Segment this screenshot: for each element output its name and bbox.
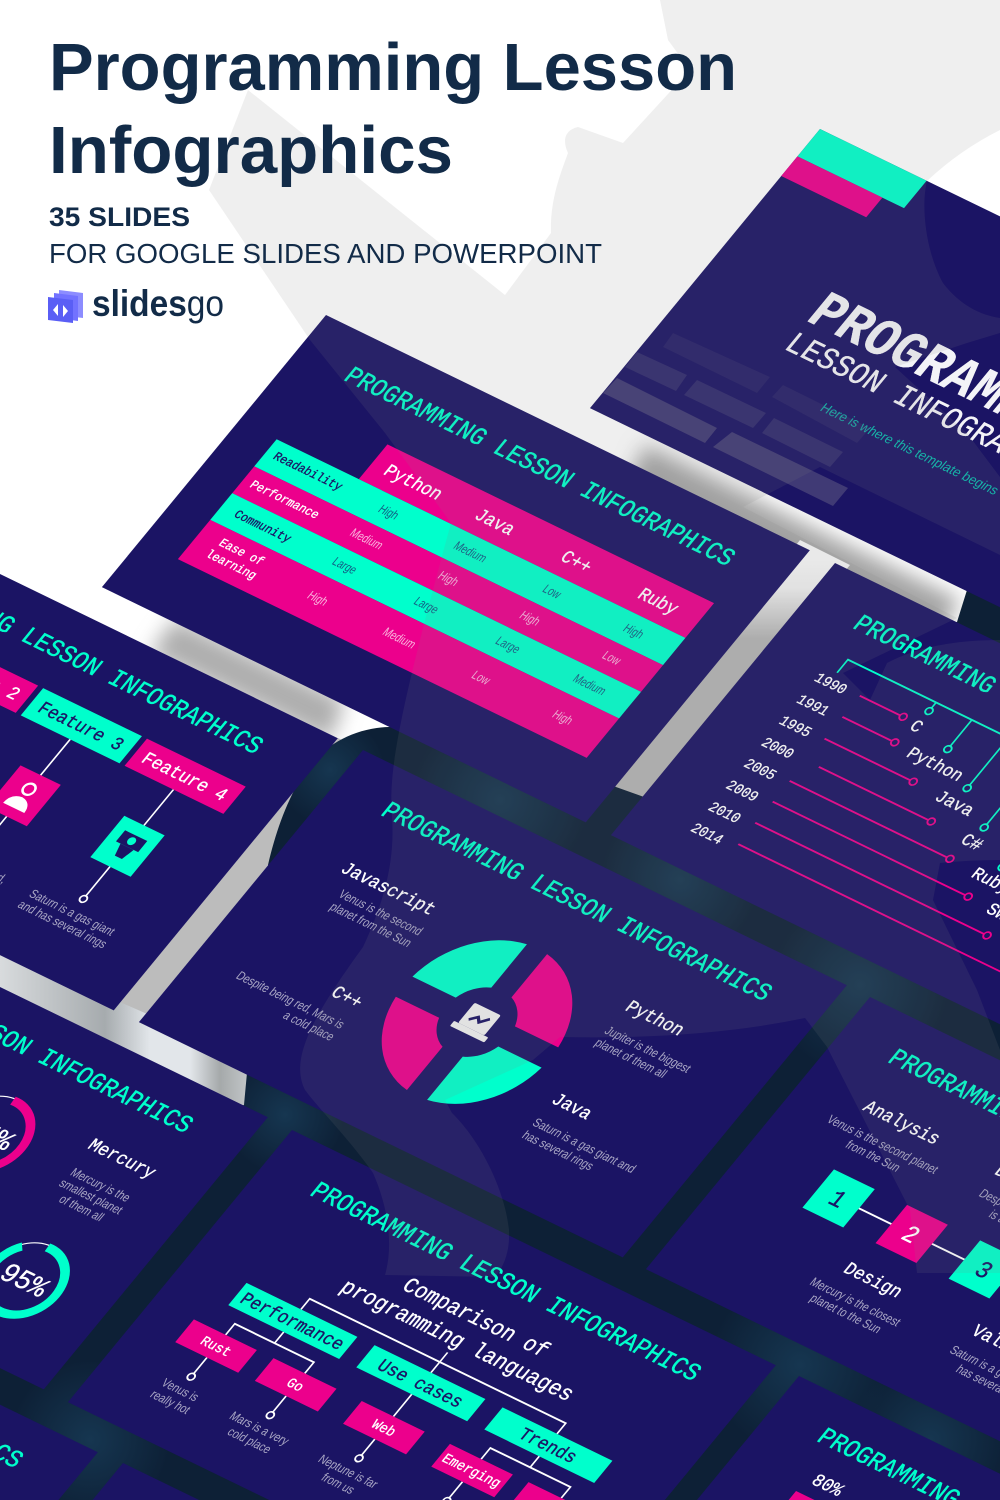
- dark backdrop behind lower slides: [0, 560, 1000, 1500]
- year labels: 2010: [704, 800, 744, 827]
- row: performance: Performance: [246, 478, 322, 522]
- connector lines: [0, 689, 173, 896]
- emerging node: Emerging: [437, 1452, 504, 1492]
- heading: PROGRAMMING LESSON INFOGRAPHICS: [337, 363, 741, 573]
- step 2: [876, 1205, 948, 1263]
- pink year lines: [738, 693, 1000, 984]
- bar: [775, 1491, 927, 1500]
- title: Infographics: [49, 113, 453, 188]
- mercury label: of them all: [56, 1192, 107, 1224]
- year labels: 1995: [775, 714, 815, 741]
- javascript label: Javascript: [335, 860, 440, 920]
- web node: Web: [367, 1417, 399, 1441]
- row: ease of learning: Ease of: [215, 536, 267, 569]
- row: community: [210, 493, 641, 719]
- icon: laptop: [450, 1001, 505, 1043]
- row: performance: Low: [599, 650, 624, 668]
- tree title: Comparison of: [396, 1274, 555, 1363]
- design label: Mercury is the closest: [807, 1275, 905, 1330]
- step 1: [802, 1169, 875, 1227]
- feature 4 tag: Feature 4: [136, 750, 231, 806]
- row: ease of learning: Low: [468, 669, 493, 688]
- python label: [592, 998, 716, 1088]
- title: Programming Lesson: [49, 30, 737, 105]
- rust node: [175, 1319, 257, 1373]
- java label: has several rings: [519, 1128, 597, 1173]
- row: ease of learning: Medium: [379, 626, 418, 651]
- teal language branches: [750, 660, 1000, 982]
- icon: slidesgo logo: [48, 290, 83, 323]
- design label: planet to the Sun: [807, 1291, 885, 1336]
- node descriptions: Venus is: [158, 1375, 203, 1404]
- analysis label: from the Sun: [842, 1137, 904, 1175]
- feature 4 tag: [125, 739, 246, 814]
- table header: Python: [378, 462, 446, 505]
- development label: [964, 1162, 1000, 1257]
- javascript label: [312, 860, 443, 950]
- feature 4 text: and has several rings: [15, 897, 111, 951]
- rust node: Rust: [196, 1334, 235, 1361]
- panel: comparison table slide: [102, 315, 810, 822]
- year labels: 1990: [810, 671, 850, 698]
- node descriptions: cold place: [224, 1424, 275, 1457]
- javascript label: planet from the Sun: [326, 899, 415, 950]
- panel: bottom-left slide: [0, 1217, 98, 1500]
- row: readability: High: [620, 622, 646, 642]
- row: performance: [232, 466, 663, 692]
- feature 3 tag: Feature 3: [32, 699, 128, 756]
- background silhouette overlay: [209, 0, 1000, 1277]
- row: readability: Readability: [270, 450, 346, 494]
- panel: timeline slide: [611, 563, 1000, 1070]
- panel: bars slide: [575, 1376, 1000, 1500]
- table header: C++: [555, 548, 596, 578]
- end dots: [0, 794, 89, 903]
- trends node: Trends: [513, 1425, 581, 1468]
- go node: [255, 1358, 337, 1411]
- design label: Design: [838, 1260, 906, 1303]
- table header: Ruby: [632, 586, 682, 620]
- ring chart: teal: [0, 1230, 86, 1330]
- step 3: [949, 1240, 1000, 1299]
- row: performance: Medium: [347, 527, 386, 552]
- mercury label: [45, 1136, 160, 1230]
- row: readability: Medium: [450, 540, 489, 565]
- row: ease of learning: High: [549, 709, 575, 728]
- brand name: slidesgo: [92, 283, 224, 324]
- cover code blocks: [603, 333, 870, 506]
- trends node: [484, 1407, 612, 1483]
- subtitle: compatibility: FOR GOOGLE SLIDES AND POWERPOINT: [49, 238, 602, 269]
- row: community: Large: [411, 595, 441, 617]
- java label: [519, 1091, 660, 1189]
- row: performance: High: [435, 570, 461, 589]
- c++ label: C++: [326, 983, 367, 1013]
- node descriptions: [147, 1375, 381, 1500]
- table header: [359, 444, 714, 638]
- validation label: [937, 1320, 1000, 1415]
- use cases node: [356, 1345, 485, 1421]
- icon: microphone on teal square: [90, 816, 165, 877]
- feature 4 text: Saturn is a gas giant: [26, 886, 119, 939]
- row: readability: High: [375, 503, 401, 523]
- row: ease of learning: [178, 520, 619, 758]
- row: performance: High: [516, 609, 543, 629]
- c++ label: Despite being red, Mars is: [233, 968, 348, 1032]
- cover pink tag: [781, 156, 882, 217]
- javascript label: Venus is the second: [335, 887, 426, 938]
- python label: planet of them all: [592, 1035, 670, 1081]
- row: community: Community: [230, 508, 294, 546]
- panel: percentages slide: [0, 882, 268, 1389]
- language labels: [818, 717, 1000, 938]
- language labels: C#: [956, 831, 987, 856]
- panel: bottom slide: [0, 1463, 607, 1500]
- panel: comparison tree slide: [68, 1130, 776, 1500]
- use cases node: Use cases: [372, 1357, 467, 1413]
- analysis label: Venus is the second planet: [824, 1112, 942, 1177]
- year labels: 2005: [739, 757, 779, 784]
- java label: Java: [546, 1091, 596, 1125]
- year labels: 2014: [686, 821, 726, 849]
- feature 3 tag: [21, 688, 142, 763]
- python label: Python: [620, 998, 688, 1041]
- feature 2 tag: [0, 638, 38, 713]
- analysis label: [814, 1089, 961, 1189]
- performance node: Performance: [235, 1290, 348, 1355]
- emerging node: [431, 1444, 513, 1497]
- cover teal tag: [797, 129, 927, 208]
- analysis label: Analysis: [858, 1098, 944, 1150]
- mercury label: smallest planet: [56, 1176, 127, 1218]
- table header: Java: [469, 506, 519, 540]
- cover tagline: Here is where this template begins: [817, 400, 1000, 498]
- go node: Go: [282, 1376, 307, 1396]
- heading: PROGRAMMING LESSON INFOGRAPHICS: [374, 798, 778, 1008]
- tree lines: [194, 1270, 614, 1500]
- python label: Jupiter is the biggest: [602, 1023, 695, 1076]
- icon: person on pink square: [0, 765, 61, 826]
- node descriptions: Neptune is far: [315, 1452, 381, 1491]
- panel: donut slide: [139, 750, 847, 1257]
- node descriptions: from us: [318, 1470, 358, 1497]
- row: ease of learning: learning: [202, 548, 260, 583]
- language labels: Java: [929, 788, 978, 821]
- c++ label: a cold place: [280, 1008, 338, 1044]
- java label: Saturn is a gas giant and: [529, 1115, 639, 1176]
- language labels: Python: [901, 744, 967, 787]
- year labels: 2009: [722, 778, 761, 806]
- connector: [838, 1198, 1000, 1323]
- year labels: 1991: [792, 693, 832, 720]
- feature 3 text: [0, 837, 14, 900]
- donut chart: [344, 914, 610, 1130]
- step 2: 2: [894, 1222, 925, 1250]
- year labels: 2000: [757, 736, 797, 763]
- language labels: C: [904, 717, 927, 738]
- row: community: Large: [329, 556, 359, 577]
- row: community: Large: [492, 635, 523, 656]
- row: readability: Low: [539, 583, 564, 602]
- heading: PROGRAMMING LESSON INFOGRAPHICS: [303, 1178, 707, 1388]
- panel: process slide: [646, 997, 1000, 1500]
- design label: [797, 1252, 923, 1341]
- subtitle: slide count: 35 SLIDES: [49, 202, 190, 232]
- title: [49, 30, 737, 188]
- node descriptions: Mars is a very: [226, 1409, 293, 1448]
- end dots: [186, 1372, 452, 1500]
- mercury label: Mercury: [83, 1136, 160, 1184]
- panel: features slide: [0, 503, 338, 1010]
- step 3: 3: [967, 1258, 998, 1286]
- hot node: [510, 1482, 592, 1500]
- node descriptions: really hot: [147, 1387, 194, 1417]
- tree title: programming languages: [334, 1275, 580, 1407]
- row: readability: [254, 439, 685, 665]
- panel: cover slide: [590, 129, 1000, 648]
- row: community: Medium: [570, 673, 609, 698]
- ring chart: pink: [0, 1083, 52, 1183]
- mercury label: Mercury is the: [67, 1165, 134, 1205]
- step 1: 1: [821, 1187, 852, 1215]
- web node: [343, 1401, 425, 1454]
- c++ label: [223, 946, 367, 1044]
- shadows in light gaps: [0, 445, 960, 1112]
- row: ease of learning: High: [304, 590, 330, 609]
- year labels: [686, 671, 850, 849]
